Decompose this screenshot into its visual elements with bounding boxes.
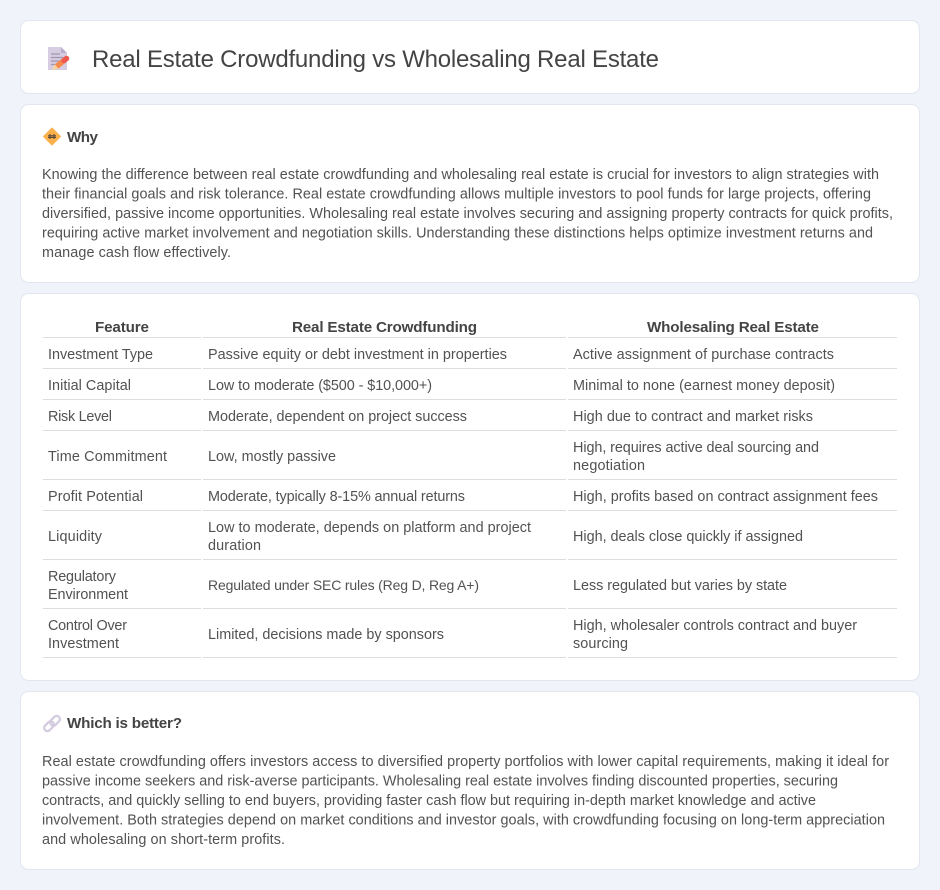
row: risk level: Moderate, dependent on project success (208, 409, 467, 425)
row: initial capital: Initial Capital (48, 378, 131, 394)
text block: why paragraph: diversified, passive income opportunities. Wholesaling real estate involves securing and assigning property contracts for quick profits, (42, 206, 893, 222)
row: control over investment: Limited, decisions made by sponsors (208, 627, 444, 643)
text block: which is better paragraph: involvement. Both strategies depend on market conditions and investor goals, with crowdfunding focusing on long-term appreciation (42, 812, 885, 828)
row: initial capital: Minimal to none (earnest money deposit) (573, 378, 835, 394)
row: control over investment: sourcing (573, 636, 628, 652)
row: liquidity: High, deals close quickly if assigned (573, 529, 803, 545)
table header row: Wholesaling Real Estate (647, 319, 819, 336)
row: control over investment: Control Over (48, 618, 127, 634)
table header row: Feature (95, 319, 149, 336)
row: risk level (43, 409, 897, 431)
row: profit potential: Moderate, typically 8-15% annual returns (208, 489, 465, 505)
row: investment type (43, 347, 897, 369)
row: profit potential: High, profits based on contract assignment fees (573, 489, 878, 505)
panel: title header (20, 20, 920, 94)
row: profit potential (43, 489, 897, 511)
text block: why paragraph: requiring active market involvement and negotiation skills. Understanding these distinctions helps optimize investment returns and (42, 226, 873, 242)
panel: which is better (20, 692, 920, 870)
row: control over investment (43, 618, 897, 658)
row: initial capital: Low to moderate ($500 - $10,000+) (208, 378, 432, 394)
table header row (43, 319, 897, 338)
row: regulatory environment: Environment (48, 587, 128, 603)
row: time commitment: Low, mostly passive (208, 449, 336, 465)
icon: warning diamond (44, 128, 60, 145)
row: control over investment: High, wholesaler controls contract and buyer (573, 618, 857, 634)
table header row: Real Estate Crowdfunding (292, 319, 477, 336)
row: profit potential: Profit Potential (48, 489, 143, 505)
row: liquidity: Liquidity (48, 529, 103, 545)
panel: comparison table (20, 294, 920, 680)
row: initial capital (43, 378, 897, 400)
row: regulatory environment: Regulatory (48, 569, 117, 585)
row: liquidity: duration (208, 538, 261, 554)
row: investment type: Active assignment of purchase contracts (573, 347, 834, 363)
text block: why paragraph: Knowing the difference between real estate crowdfunding and wholesaling real estate is crucial for investors to align strategies with (42, 167, 879, 183)
text block: which is better paragraph: and wholesaling on short-term profits. (42, 832, 285, 848)
text block: which is better paragraph: Real estate crowdfunding offers investors access to diversified property portfolios with lower capital requirements, making it ideal for (42, 754, 889, 770)
text block: which is better paragraph: passive income seekers and risk-averse participants. Wholesaling real estate involves finding discounted properties, securing (42, 774, 838, 790)
row: time commitment: negotiation (573, 458, 645, 474)
text block: why paragraph (42, 167, 893, 261)
row: regulatory environment (43, 569, 897, 609)
text block: which is better paragraph: contracts, and quickly selling to end buyers, providing faster cash flow but requiring in-depth market knowledge and active (42, 793, 816, 809)
heading: which is better: Which is better? (67, 715, 182, 732)
row: time commitment: High, requires active deal sourcing and (573, 440, 819, 456)
text block: why paragraph: manage cash flow effectively. (42, 245, 231, 261)
row: risk level: High due to contract and market risks (573, 409, 813, 425)
text block: which is better paragraph (42, 754, 889, 848)
text block: why paragraph: their financial goals and risk tolerance. Real estate crowdfunding allows multiple investors to pool funds for large projects, offering (42, 186, 871, 202)
row: investment type: Passive equity or debt investment in properties (208, 347, 507, 363)
row: liquidity: Low to moderate, depends on platform and project (208, 520, 531, 536)
panel: why (20, 104, 920, 282)
icon: memo with pencil (48, 47, 67, 70)
row: regulatory environment: Less regulated but varies by state (573, 578, 787, 594)
row: investment type: Investment Type (48, 347, 153, 363)
icon: chain link (43, 715, 61, 732)
row: time commitment: Time Commitment (48, 449, 167, 465)
row: liquidity (43, 520, 897, 560)
heading: why: Why (67, 129, 99, 146)
title: Real Estate Crowdfunding vs Wholesaling Real Estate (92, 46, 659, 73)
row: regulatory environment: Regulated under SEC rules (Reg D, Reg A+) (208, 577, 479, 593)
row: risk level: Risk Level (48, 409, 112, 425)
row: time commitment (43, 440, 897, 480)
row: control over investment: Investment (48, 636, 119, 652)
